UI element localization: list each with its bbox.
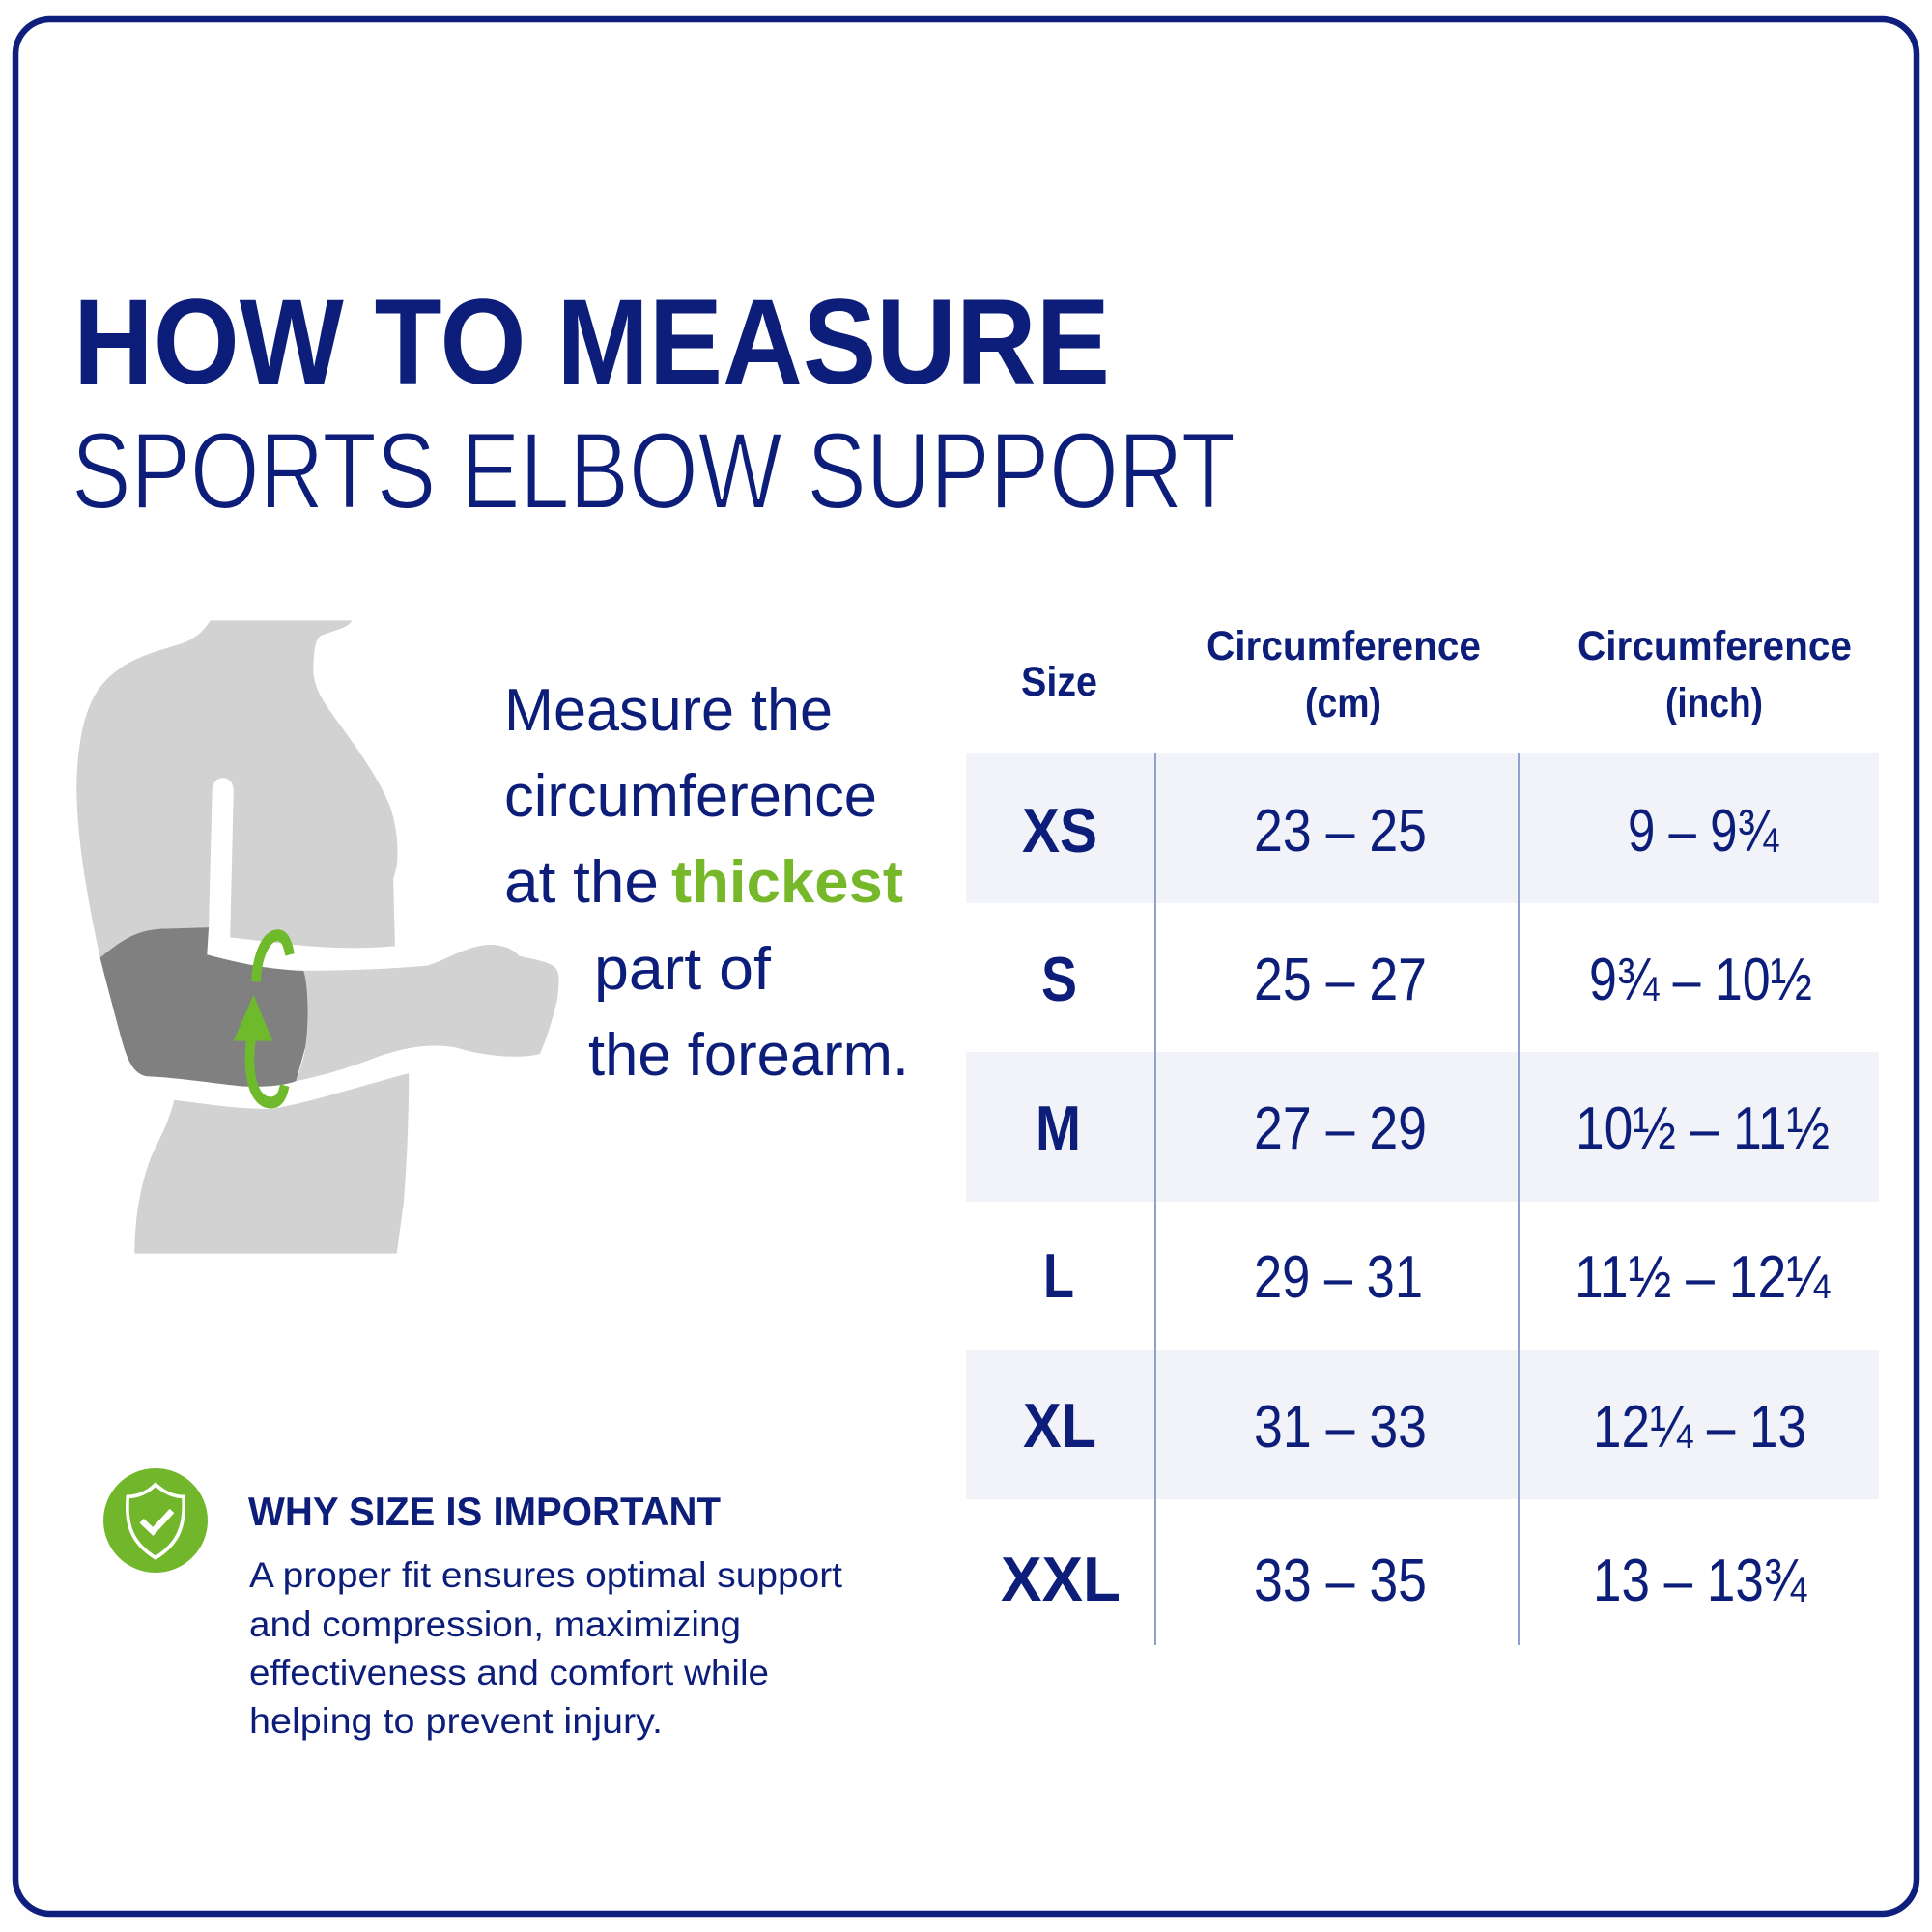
row M: M [1036, 1093, 1081, 1163]
icon: green circumference arrow [234, 935, 290, 1102]
line 5: the forearm. [588, 1022, 909, 1089]
header: cm unit: (cm) [1305, 680, 1381, 726]
row XL [1023, 1390, 1806, 1461]
row S: 9¾ – 10½ [1589, 947, 1812, 1013]
line 2: circumference [504, 763, 877, 830]
illustration: arm with elbow support [76, 620, 559, 1254]
row XXL [1001, 1544, 1807, 1614]
line 1: Measure the [504, 677, 833, 744]
line 4: part of [594, 936, 772, 1003]
row XL: 12¼ – 13 [1593, 1394, 1806, 1461]
row M: 27 – 29 [1254, 1095, 1427, 1162]
heading: how to measure: HOW TO MEASURE [73, 275, 1110, 410]
icon: green shield check [103, 1468, 208, 1573]
header: circumference inch: Circumference [1577, 623, 1852, 669]
header: size: Size [1021, 659, 1097, 705]
row L: L [1043, 1240, 1074, 1311]
row M: 10½ – 11½ [1576, 1095, 1830, 1162]
row XS: 9 – 9¾ [1628, 798, 1779, 865]
table header [1021, 623, 1852, 726]
header: circumference cm: Circumference [1207, 623, 1481, 669]
callout body text: A proper fit ensures optimal support [249, 1555, 843, 1595]
subheading: sports elbow support: SPORTS ELBOW SUPPORT [71, 411, 1236, 531]
row XL: XL [1023, 1390, 1096, 1461]
row XXL: 13 – 13¾ [1593, 1548, 1807, 1614]
row XXL: 33 – 35 [1254, 1548, 1427, 1614]
row M [1036, 1093, 1830, 1163]
row S: S [1041, 944, 1077, 1014]
callout heading: WHY SIZE IS IMPORTANT [248, 1489, 721, 1534]
row XXL: XXL [1001, 1544, 1121, 1614]
row L [1043, 1240, 1831, 1311]
table row stripes [966, 753, 1879, 1499]
row XL: 31 – 33 [1254, 1394, 1427, 1461]
callout body text: and compression, maximizing [249, 1605, 741, 1644]
row S [1041, 944, 1812, 1014]
size chart table [966, 623, 1879, 1645]
callout body text [249, 1555, 843, 1741]
forearm and fist [296, 945, 559, 1081]
callout: why size is important [103, 1468, 843, 1741]
elbow sleeve [100, 927, 308, 1087]
row XS [1022, 795, 1779, 866]
upper torso and arm [76, 620, 397, 957]
lower torso [134, 1073, 409, 1254]
column dividers [1154, 753, 1520, 1645]
instruction text [504, 677, 909, 1089]
row XS: XS [1022, 795, 1097, 866]
line 3: at the [504, 849, 659, 916]
row S: 25 – 27 [1254, 947, 1427, 1013]
row XS: 23 – 25 [1254, 798, 1427, 865]
callout body text: effectiveness and comfort while [249, 1653, 769, 1692]
row L: 29 – 31 [1254, 1244, 1423, 1311]
header: inch unit: (inch) [1665, 680, 1763, 726]
highlighted word: thickest: thickest [671, 849, 903, 916]
row L: 11½ – 12¼ [1575, 1244, 1831, 1311]
title [71, 275, 1236, 531]
callout body text: helping to prevent injury. [249, 1701, 663, 1741]
